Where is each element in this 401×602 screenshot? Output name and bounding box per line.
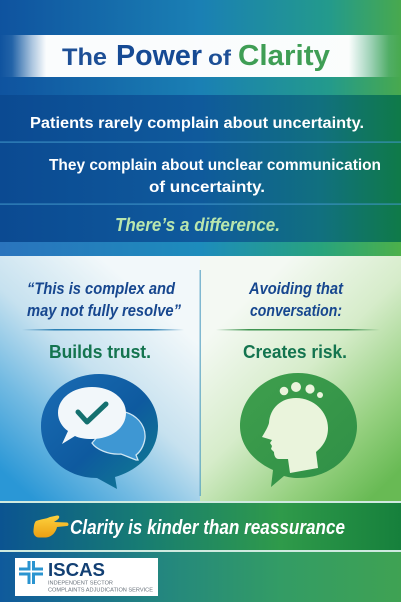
logo subtitle — [48, 580, 154, 594]
title: Clarity — [238, 40, 330, 72]
logo name: ISCAS — [48, 560, 105, 580]
statement 3: There’s a difference. — [115, 215, 280, 235]
banner — [0, 501, 401, 552]
statement 1: Patients rarely complain about uncertainty. — [30, 115, 364, 132]
panel: left — [0, 256, 200, 502]
icon: head with thought dots — [240, 373, 357, 487]
statement 2: of uncertainty. — [149, 179, 265, 196]
right heading — [248, 279, 344, 320]
logo — [15, 558, 158, 596]
statement 2: They complain about unclear communication — [49, 157, 381, 174]
logo subtitle: COMPLAINTS ADJUDICATION SERVICE — [48, 588, 154, 594]
title: The — [62, 44, 107, 71]
title: of — [208, 47, 232, 70]
title band — [0, 35, 401, 77]
right heading: Avoiding that — [248, 279, 344, 298]
banner text: Clarity is kinder than reassurance — [70, 517, 345, 539]
left result: Builds trust. — [49, 342, 151, 362]
panel: right — [200, 256, 401, 502]
left quote: may not fully resolve” — [27, 301, 181, 320]
logo subtitle: INDEPENDENT SECTOR — [48, 580, 113, 586]
panel: statements — [0, 95, 401, 242]
title: Power — [116, 40, 202, 72]
right heading: conversation: — [250, 301, 342, 320]
right result: Creates risk. — [243, 342, 347, 362]
left quote: “This is complex and — [27, 279, 176, 298]
icon: cross — [19, 561, 43, 584]
divider — [200, 270, 201, 496]
left quote — [27, 279, 181, 320]
icon: pointing hand — [33, 515, 68, 538]
statement 2 — [49, 157, 381, 196]
strip — [0, 242, 401, 256]
icon: speech bubbles with check — [41, 374, 158, 489]
